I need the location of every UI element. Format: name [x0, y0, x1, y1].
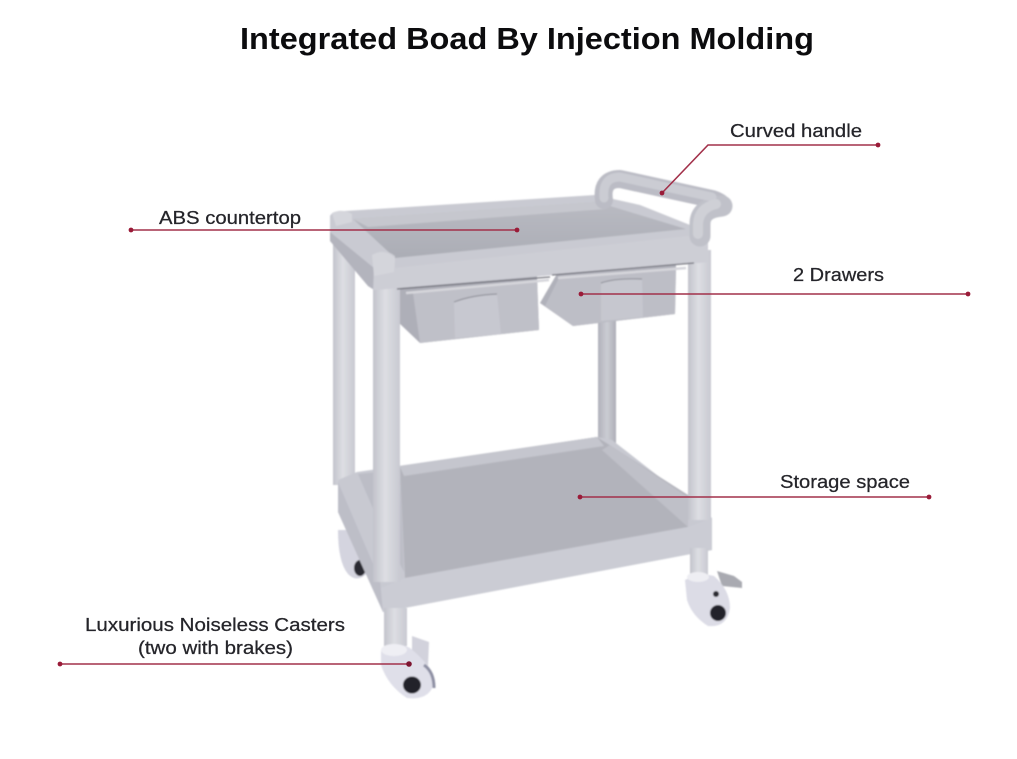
drawer rails [397, 263, 694, 293]
callout: 2 drawers: 2 Drawers [793, 264, 884, 285]
title: Integrated Boad By Injection Molding [240, 21, 814, 56]
lower shelf [338, 437, 712, 612]
callout: 2 drawers [579, 264, 970, 296]
trolley illustration [330, 177, 742, 698]
back-left caster [338, 530, 368, 579]
front-right lower leg [690, 548, 708, 580]
callout: ABS countertop [129, 207, 519, 232]
front-left leg [373, 280, 400, 582]
top tray [330, 195, 708, 290]
callout: storage space: Storage space [780, 471, 910, 492]
callout: curved handle [660, 120, 880, 195]
drawer: left [396, 276, 539, 343]
back-right caster [685, 571, 742, 626]
back legs [333, 240, 616, 485]
callout: ABS countertop: ABS countertop [159, 207, 301, 228]
front-right leg [688, 250, 711, 520]
curved handle [604, 177, 722, 236]
callout: casters [58, 614, 412, 667]
front-left caster [381, 636, 435, 698]
callout: casters: (two with brakes) [138, 637, 293, 658]
callout: storage space [578, 471, 931, 499]
callout: curved handle: Curved handle [730, 120, 862, 141]
drawer: right [540, 264, 676, 326]
callout: casters: Luxurious Noiseless Casters [85, 614, 345, 635]
front-left lower leg [384, 608, 407, 646]
